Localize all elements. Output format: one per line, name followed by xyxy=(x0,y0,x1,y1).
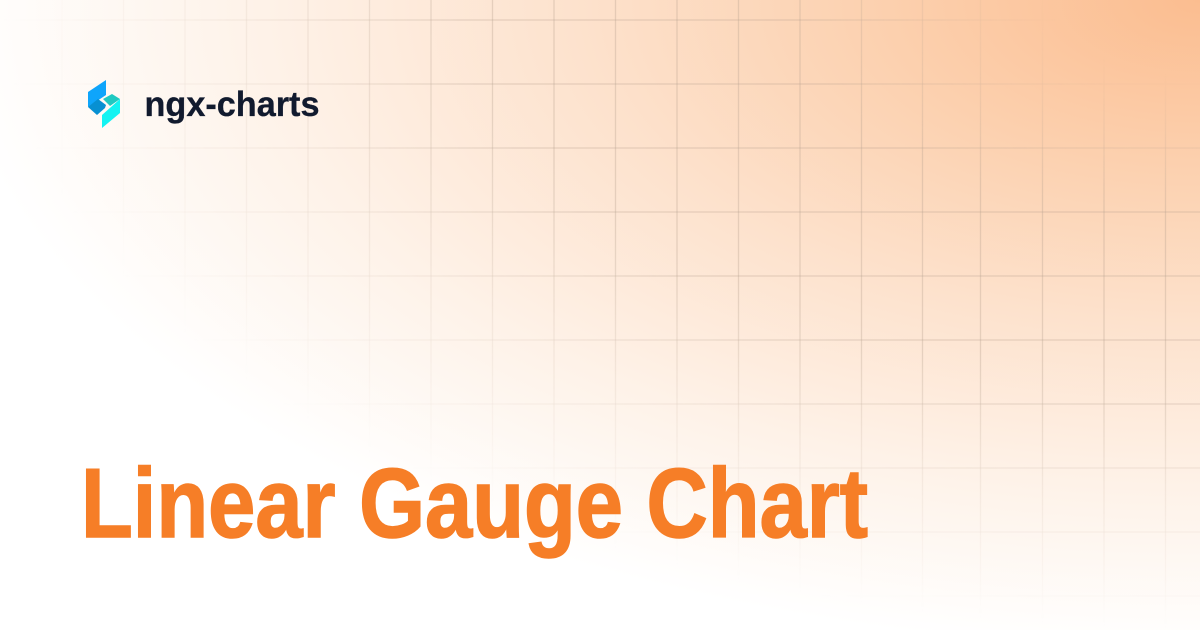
logo wordmark: ngx-charts xyxy=(144,85,320,124)
background grid lines xyxy=(123,0,1200,544)
icon: ngx-charts logo xyxy=(88,80,120,128)
title: Linear Gauge Chart xyxy=(81,448,868,558)
